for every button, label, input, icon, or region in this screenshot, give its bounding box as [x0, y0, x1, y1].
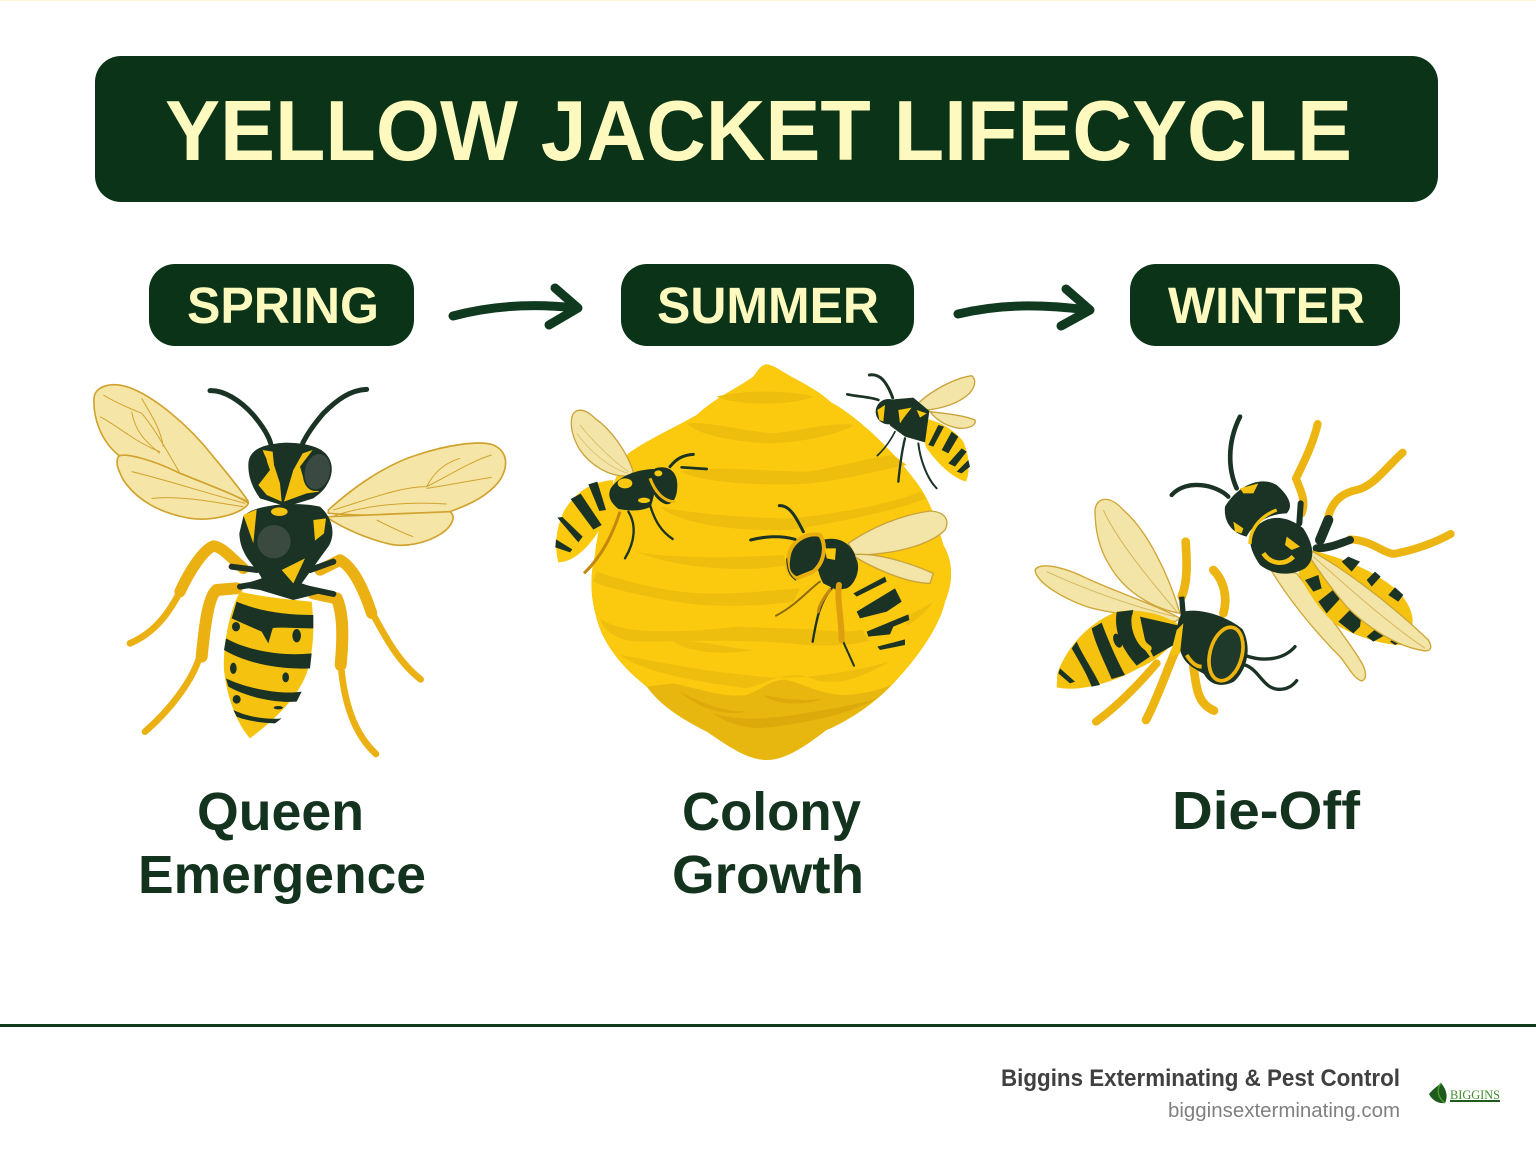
label: die-off: Die-Off — [1172, 781, 1361, 841]
logo: biggins — [1429, 1083, 1500, 1103]
illustration: paper nest with three wasps — [555, 364, 975, 760]
season pill: summer: SUMMER — [657, 277, 879, 334]
footer company name: Biggins Exterminating & Pest Control — [1001, 1065, 1400, 1092]
wasp: top right — [847, 375, 975, 488]
label: queen emergence: Emergence — [138, 845, 426, 905]
arrow: spring to summer — [453, 288, 578, 325]
illustration: queen wasp — [94, 385, 506, 754]
wasp: upper right — [1172, 417, 1451, 681]
label: colony growth — [672, 782, 864, 905]
season pill: spring: SPRING — [187, 277, 379, 334]
illustration: dead wasps — [1035, 417, 1451, 722]
nest — [591, 364, 951, 760]
logo: biggins: BIGGINS — [1450, 1087, 1500, 1102]
footer divider — [0, 1024, 1536, 1027]
wasp: left on nest — [555, 410, 707, 573]
label: queen emergence — [138, 782, 426, 905]
footer website: bigginsexterminating.com — [1168, 1100, 1400, 1122]
label: colony growth: Colony — [682, 782, 861, 842]
season pill: summer — [621, 264, 914, 346]
season pill: spring — [149, 264, 414, 346]
label: queen emergence: Queen — [197, 782, 364, 842]
title banner: YELLOW JACKET LIFECYCLE — [165, 84, 1352, 179]
season pill: winter — [1130, 264, 1400, 346]
label: colony growth: Growth — [672, 845, 864, 905]
title banner — [95, 56, 1438, 202]
season pill: winter: WINTER — [1168, 277, 1365, 334]
arrow: summer to winter — [958, 289, 1090, 326]
wasp: centre on nest — [751, 506, 947, 666]
wasp: lower left — [1035, 499, 1297, 722]
